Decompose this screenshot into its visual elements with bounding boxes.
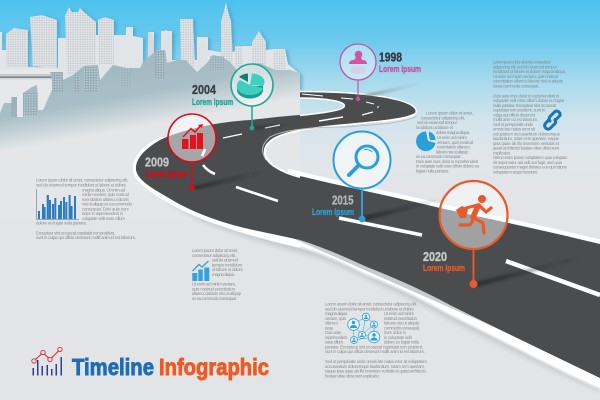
grey ground behind the skyline <box>0 100 300 220</box>
paper-cut light ground under the skyline <box>0 68 58 125</box>
label 2009 caption: Lorem ipsum <box>146 169 187 180</box>
label 1998: 1998 <box>379 50 402 64</box>
text block: small center with chart icon: quis nostrud exercitation <box>192 286 236 291</box>
text block: top right with link icon: Lorem ipsum dolor sit amet, consectetur <box>493 60 552 64</box>
text block: middle with pie icon: sed do eiusmod tempor <box>417 120 458 125</box>
lower white curb <box>133 137 600 390</box>
icon: title chart logo <box>32 347 62 376</box>
text block: left with bar chart: exercitation ullamco laboris <box>82 197 129 202</box>
text block: bottom with network icon: reprehenderit <box>325 335 348 340</box>
text block: bottom with network icon: magna aliqua. <box>325 311 348 316</box>
text block: bottom with network icon: commodo consequat. <box>384 325 420 330</box>
text block: bottom with network icon: dolore eu fugiat nulla <box>384 340 420 344</box>
text block: top right with link icon: ea ea commodo consequat. <box>493 83 539 88</box>
icon: user stamp <box>349 51 367 74</box>
label 2009: 2009 <box>145 154 169 170</box>
text block: top right with link icon: voluptatem sequi nesciunt. <box>493 169 538 174</box>
text block: bottom with network icon: Duis aute <box>325 330 342 335</box>
text block: left with bar chart: minim veniam, quis nostrud <box>82 192 130 197</box>
text block: top right with link icon: laudantium, totam rem aperiam, eaque <box>493 136 560 141</box>
pin 2015: blue magnifier <box>312 132 390 222</box>
text block: small center with chart icon: ullamco laboris nisi ut aliquip <box>192 291 242 296</box>
text block: bottom with network icon: irure dolor in <box>384 330 407 335</box>
city skyline <box>0 2 300 150</box>
text block: small center with chart icon: magna aliqua. <box>212 272 235 277</box>
title: Infographic <box>159 354 269 380</box>
text block: middle with pie icon: exercitation ullamco <box>437 144 471 150</box>
icon: pie chart <box>237 74 265 98</box>
text block: middle with pie icon: dolore magna aliqua. <box>436 130 470 135</box>
text block: bottom with network icon <box>325 302 427 378</box>
text block: middle with pie icon: Lorem ipsum dolor sit amet, <box>426 110 473 116</box>
text block: top right with link icon: exercitation ullamco laboris nisi ut aliquip <box>493 78 564 84</box>
text block: small center with chart icon: ut labore et dolore <box>212 267 244 272</box>
text block: bottom with network icon: sed do eiusmod tempor incididunt ut labore et dolore <box>325 306 415 311</box>
text block: top right with link icon: voluptate velit esse cillum dolore eu fugiat <box>493 98 565 103</box>
text block: small center with chart icon: Lorem ipsum dolor sit amet, <box>192 248 238 253</box>
text block: top right with link icon: nulla pariatur. Excepteur sint occaecat <box>493 103 557 108</box>
elevated bridge <box>0 74 54 80</box>
title <box>72 354 269 380</box>
text block: small center with chart icon <box>192 248 244 301</box>
text block: top right with link icon: quasi architecto beatae vitae dicta sunt <box>493 146 560 150</box>
text block: left with bar chart: Excepteur sint occaecat cupidatat non proident, <box>36 230 115 235</box>
text block: top right with link icon: omnis iste natus error sit <box>493 126 536 132</box>
text block: small center with chart icon: consectetur adipiscing elit, <box>192 253 236 258</box>
icon: rising bars <box>182 124 203 149</box>
text block: top right with link icon: incididunt ut labore et dolore magna aliqua. <box>493 69 566 74</box>
icon: blue growth chart <box>192 261 209 281</box>
text block: left with bar chart: dolore eu fugiat nulla pariatur. <box>36 220 87 226</box>
icon: blue bar chart <box>36 189 79 220</box>
icon: running person <box>456 195 491 233</box>
text block: top right with link icon: sit aspernatur aut odit aut fugit, sed quia <box>493 160 563 165</box>
pin 2009: red bar chart <box>145 114 216 191</box>
icon: people network <box>348 313 380 344</box>
text block: left with bar chart: magna aliqua. Ut enim ad <box>82 187 126 192</box>
title: Timeline <box>72 354 154 380</box>
text block: middle with pie icon: laboris nisi ut aliquip <box>436 149 469 154</box>
text block: bottom with network icon: ex ea <box>325 325 334 330</box>
text block: middle with pie icon <box>416 110 480 173</box>
text block: small center with chart icon: Ut enim ad minim veniam, <box>192 282 236 286</box>
label 2004 caption: Lorem ipsum <box>192 97 233 108</box>
text block: bottom with network icon: beatae vitae dicta sunt explicabo. <box>325 373 380 378</box>
text block: small center with chart icon: tempor incididunt <box>212 262 243 267</box>
text block: bottom with network icon: nostrud exercitation <box>384 316 418 321</box>
text block: top right with link icon: cupidatat non proident, sunt in <box>493 108 546 112</box>
text block: left with bar chart <box>36 178 136 240</box>
text block: bottom with network icon: Lorem ipsum dolor sit amet, consectetur adipiscing elit, <box>325 302 417 306</box>
text block: bottom with network icon: sunt in culpa qui officia deserunt mollit anim id est laborum. <box>325 349 425 354</box>
label 2020 caption: Lorem ipsum <box>423 263 465 274</box>
text block: bottom with network icon: in voluptate velit <box>384 335 413 340</box>
icon: chain link <box>545 111 560 129</box>
text block: bottom with network icon: esse cillum <box>325 340 343 344</box>
pin 1998: pink user <box>340 44 421 101</box>
text block: top right with link icon: voluptatem accusantium doloremque <box>493 131 561 136</box>
text block: left with bar chart: sed do eiusmod tempor incididunt ut labore et dolore <box>36 182 127 187</box>
pin 2004: teal pie chart <box>192 64 273 130</box>
text block: left with bar chart: dolor in reprehenderit in <box>82 211 124 216</box>
text block: middle with pie icon: fugiat nulla pariatur. <box>416 168 449 173</box>
text block: left with bar chart: consequat. Duis aute irure <box>82 206 130 211</box>
text block: top right with link icon: adipiscing elit, sed do eiusmod tempor <box>493 64 558 69</box>
text block: middle with pie icon: incididunt ut labore et <box>416 125 454 130</box>
label 2004: 2004 <box>192 82 217 97</box>
text block: bottom with network icon: veniam, quis <box>325 316 346 321</box>
text block: top right with link icon: Ut enim ad minim veniam, quis nostrud <box>493 74 559 79</box>
text block: left with bar chart: voluptate velit esse cillum <box>82 216 125 221</box>
text block: top right with link icon: Nemo enim ipsam voluptatem quia voluptas <box>493 155 567 160</box>
foreground skyline silhouette <box>0 50 300 150</box>
road curb shadow <box>165 200 600 392</box>
text block: top right with link icon <box>493 60 568 174</box>
label 2015: 2015 <box>332 192 354 208</box>
pin 2020: orange runner <box>423 181 508 288</box>
text block: middle with pie icon: consectetur adipiscing elit, <box>421 115 465 120</box>
text block: middle with pie icon: veniam, quis nostrud <box>437 140 474 145</box>
text block: bottom with network icon: eaque ipsa quae ab illo inventore veritatis et quasi architecto <box>325 368 427 374</box>
text block: bottom with network icon: Sed ut perspiciatis unde omnis iste natus error sit voluptatem <box>325 359 427 364</box>
text block: bottom with network icon: accusantium doloremque laudantium, totam rem aperiam, <box>325 364 425 369</box>
text block: small center with chart icon: ex ea commodo consequat. <box>192 296 237 301</box>
text block: middle with pie icon: ex ea commodo consequat. <box>416 154 461 159</box>
text block: bottom with network icon: laboris nisi ut aliquip <box>384 320 420 326</box>
text block: top right with link icon: Duis aute irure dolor in reprehenderit in <box>493 93 560 98</box>
text block: middle with pie icon: Ut enim ad minim <box>437 135 467 140</box>
text block: bottom with network icon: pariatur. Excepteur sint occaecat cupidatat non proident, <box>325 344 423 349</box>
text block: left with bar chart: sunt in culpa qui officia deserunt mollit anim id est laborum. <box>36 235 136 240</box>
upper white curb of main road <box>288 171 600 242</box>
road <box>133 92 600 390</box>
icon: magnifier <box>349 146 378 175</box>
icon: blue pie <box>416 131 436 151</box>
text block: top right with link icon: culpa qui officia deserunt <box>493 112 536 117</box>
text block: middle with pie icon: in voluptate velit esse cillum dolore eu <box>416 164 480 168</box>
text block: top right with link icon: mollit anim id est laborum. <box>493 117 538 122</box>
text block: left with bar chart: Lorem ipsum dolor sit amet, consectetur adipiscing elit, <box>36 178 128 182</box>
label 2015 caption: Lorem ipsum <box>312 207 354 218</box>
island and hairpin curbs <box>265 114 415 177</box>
text block: middle with pie icon: Duis aute irure dolor in reprehenderit <box>416 159 479 164</box>
text block: top right with link icon: ipsa quae ab illo inventore veritatis et <box>493 141 560 146</box>
text block: top right with link icon: Sed ut perspiciatis unde <box>493 122 534 127</box>
text block: top right with link icon: explicabo. <box>493 150 511 155</box>
lane dashes <box>202 94 600 295</box>
text block: small center with chart icon: sed do eiusmod <box>212 258 239 262</box>
asphalt <box>136 92 600 378</box>
label 2020: 2020 <box>423 249 447 264</box>
text block: bottom with network icon: ullamco <box>325 320 339 326</box>
label 1998 caption: Lorem ipsum <box>379 64 421 75</box>
text block: top right with link icon: consequuntur magni dolores eos qui ratione <box>493 164 568 170</box>
text block: bottom with network icon: Ut enim ad minim <box>384 311 414 316</box>
pin shadows <box>194 82 582 287</box>
text block: left with bar chart: nisi ut aliquip ex ea commodo <box>82 202 133 206</box>
